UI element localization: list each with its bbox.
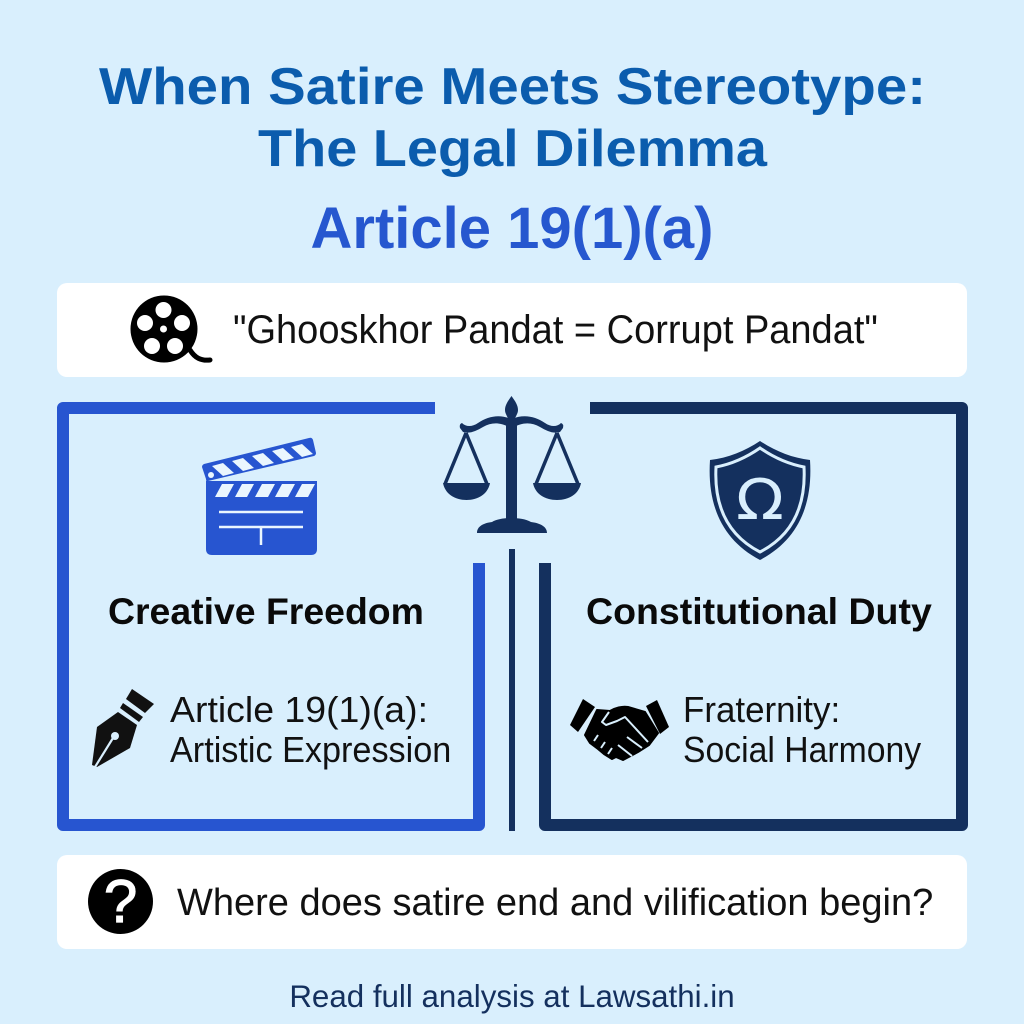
icon: clapperboard <box>202 438 317 555</box>
icon: fountain pen <box>92 689 154 767</box>
footer: Read full analysis at Lawsathi.in <box>289 979 735 1014</box>
body text: article: Artistic Expression <box>170 729 451 770</box>
panel: creative freedom <box>57 402 485 831</box>
heading: constitutional duty: Constitutional Duty <box>586 590 932 632</box>
icon: question mark: ? <box>104 868 137 935</box>
icon: handshake <box>570 699 669 761</box>
icon: film reel <box>130 296 212 363</box>
body text: article: Article 19(1)(a): <box>170 689 428 730</box>
panel border: blue <box>57 402 485 831</box>
title <box>99 58 926 178</box>
divider: center line <box>509 549 515 831</box>
panel: constitutional duty <box>539 402 968 831</box>
body text: article <box>170 689 451 770</box>
quote text: "Ghooskhor Pandat = Corrupt Pandat" <box>233 308 878 352</box>
icon: question mark <box>88 869 153 934</box>
title: The Legal Dilemma <box>258 120 767 178</box>
panel border: navy <box>539 402 968 831</box>
title: When Satire Meets Stereotype: <box>99 58 926 116</box>
body text: fraternity: Social Harmony <box>683 729 921 770</box>
heading: creative freedom: Creative Freedom <box>108 590 424 632</box>
question banner <box>57 855 967 949</box>
icon: shield with omega: Ω <box>736 468 784 533</box>
body text: fraternity <box>683 689 921 770</box>
subtitle: article: Article 19(1)(a) <box>311 196 713 261</box>
icon: scales of justice <box>443 396 581 533</box>
icon: shield with omega <box>710 441 810 560</box>
question text: Where does satire end and vilification begin? <box>177 882 933 924</box>
quote banner <box>57 283 967 377</box>
body text: fraternity: Fraternity: <box>683 689 840 730</box>
